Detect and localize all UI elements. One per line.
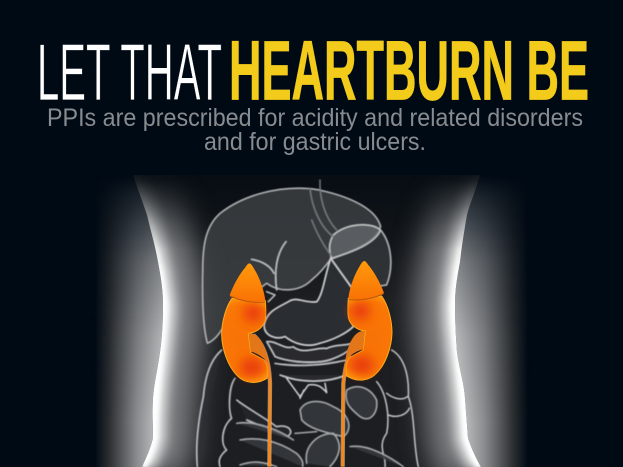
title: LET THAT [37,28,222,118]
stomach fundus [330,225,381,258]
right rim highlight [455,175,481,467]
transverse colon [267,341,355,381]
kidney body [222,298,268,382]
organs and kidneys [197,180,418,467]
left kidney [222,263,268,382]
right kidney [345,261,392,380]
renal pelvis [249,333,268,363]
left ureter [253,335,270,467]
bile duct [252,242,286,302]
right ureter [343,333,365,467]
renal pelvis [345,331,365,361]
subtitle line 2: and for gastric ulcers. [204,128,426,156]
right soft band [455,175,481,467]
esophagus [310,180,337,255]
descending colon [377,350,418,467]
left rim glow [133,175,163,467]
small intestine [237,387,403,467]
right rim glow [455,175,481,467]
torso [130,170,490,467]
torso glow [133,175,481,467]
stomach body [264,258,353,345]
ascending colon [197,350,291,467]
subtitle [47,104,583,156]
adrenal line [349,294,384,300]
liver [202,188,381,343]
torso fill [130,170,490,467]
adrenal gland [230,263,265,302]
left arm shading [98,182,163,467]
subtitle line 1: PPIs are prescribed for acidity and related disorders [47,104,583,132]
adrenal gland [348,261,384,299]
title [37,24,589,118]
mesentery center [287,378,327,398]
organs [197,180,418,467]
left soft band [133,175,163,467]
right arm shading [455,182,525,467]
right stomach lobe [328,230,391,287]
left rim highlight [142,205,170,467]
kidney body [346,296,392,380]
hot spots [240,305,264,377]
hot spots [350,302,374,374]
adrenal line [230,296,265,302]
